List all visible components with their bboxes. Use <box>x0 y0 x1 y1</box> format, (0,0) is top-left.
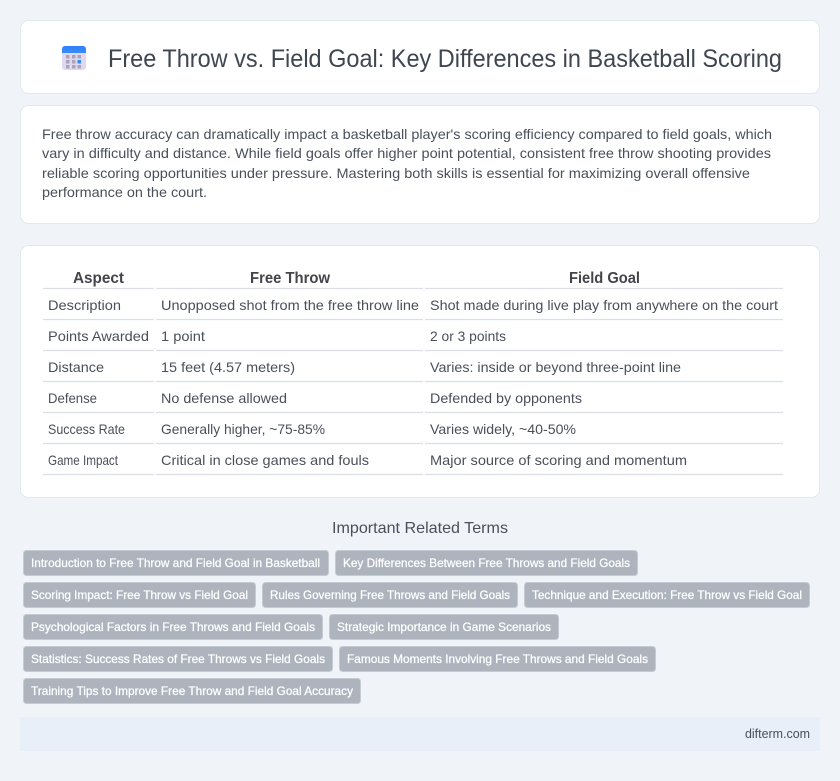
icon: calendar <box>62 46 86 70</box>
row: defense: Defended by opponents <box>430 390 582 406</box>
heading: related terms: Important Related Terms <box>332 520 508 537</box>
row: game impact: Major source of scoring and momentum <box>430 452 687 468</box>
tag: Rules Governing Free Throws and Field Goals <box>270 588 510 602</box>
row: distance: Distance <box>48 359 104 375</box>
row: success rate <box>43 421 783 444</box>
row: points awarded: 2 or 3 points <box>430 328 506 344</box>
panel: header <box>20 20 820 94</box>
row: distance: 15 feet (4.57 meters) <box>161 359 295 375</box>
row: description: Unopposed shot from the free throw line <box>161 297 419 313</box>
footer <box>20 717 820 751</box>
tag: Statistics: Success Rates of Free Throws vs Field Goals <box>31 652 325 666</box>
row: description: Shot made during live play from anywhere on the court <box>430 297 778 313</box>
tag <box>24 614 322 640</box>
row: points awarded: Points Awarded <box>48 328 149 344</box>
tag <box>340 646 656 672</box>
tag <box>24 550 328 576</box>
text block: introduction: vary in difficulty and distance. While field goals offer higher point potential, consistent free throw shooting provides <box>42 145 771 161</box>
footer: difterm.com <box>745 727 810 741</box>
row: distance: Varies: inside or beyond three-point line <box>430 359 681 375</box>
row: points awarded: 1 point <box>161 328 205 344</box>
row: success rate: Generally higher, ~75-85% <box>161 421 325 437</box>
row: distance <box>43 359 783 382</box>
tag: Training Tips to Improve Free Throw and Field Goal Accuracy <box>31 684 353 698</box>
row: game impact: Critical in close games and fouls <box>161 452 369 468</box>
row: game impact <box>43 452 783 474</box>
text block: introduction <box>42 126 772 200</box>
panel: introduction <box>20 106 820 224</box>
tag: Key Differences Between Free Throws and Field Goals <box>343 556 630 570</box>
row: game impact: Game Impact <box>48 452 118 468</box>
tag <box>336 550 638 576</box>
panel: comparison table <box>20 246 820 498</box>
row: defense: No defense allowed <box>161 390 287 406</box>
table header <box>43 270 783 288</box>
table header: Field Goal <box>569 270 640 287</box>
text block: introduction: reliable scoring opportunities under pressure. Mastering both skills is essential for maximizing overall offensive <box>42 165 750 181</box>
row: description <box>43 297 783 320</box>
row: defense: Defense <box>48 390 97 406</box>
tag: Introduction to Free Throw and Field Goal in Basketball <box>31 556 320 570</box>
row: points awarded <box>43 328 783 350</box>
tag list: related terms <box>24 550 810 704</box>
table header: Free Throw <box>250 270 331 287</box>
row: defense <box>43 390 783 412</box>
tag <box>262 582 518 608</box>
tag <box>24 678 360 704</box>
row: description: Description <box>48 297 121 313</box>
tag <box>330 614 558 640</box>
row: success rate: Success Rate <box>48 421 125 437</box>
table header: Aspect <box>73 270 125 287</box>
text block: introduction: Free throw accuracy can dramatically impact a basketball player's scoring efficiency compared to field goals, which <box>42 126 772 142</box>
title: Free Throw vs. Field Goal: Key Differences in Basketball Scoring <box>108 45 782 73</box>
tag: Strategic Importance in Game Scenarios <box>337 620 551 634</box>
tag: Famous Moments Involving Free Throws and Field Goals <box>347 652 648 666</box>
tag: Psychological Factors in Free Throws and Field Goals <box>31 620 315 634</box>
tag <box>24 646 332 672</box>
row: success rate: Varies widely, ~40-50% <box>430 421 576 437</box>
tag <box>524 582 810 608</box>
tag <box>24 582 256 608</box>
text block: introduction: performance on the court. <box>42 184 207 200</box>
tag: Technique and Execution: Free Throw vs Field Goal <box>532 588 802 602</box>
tag: Scoring Impact: Free Throw vs Field Goal <box>31 588 248 602</box>
